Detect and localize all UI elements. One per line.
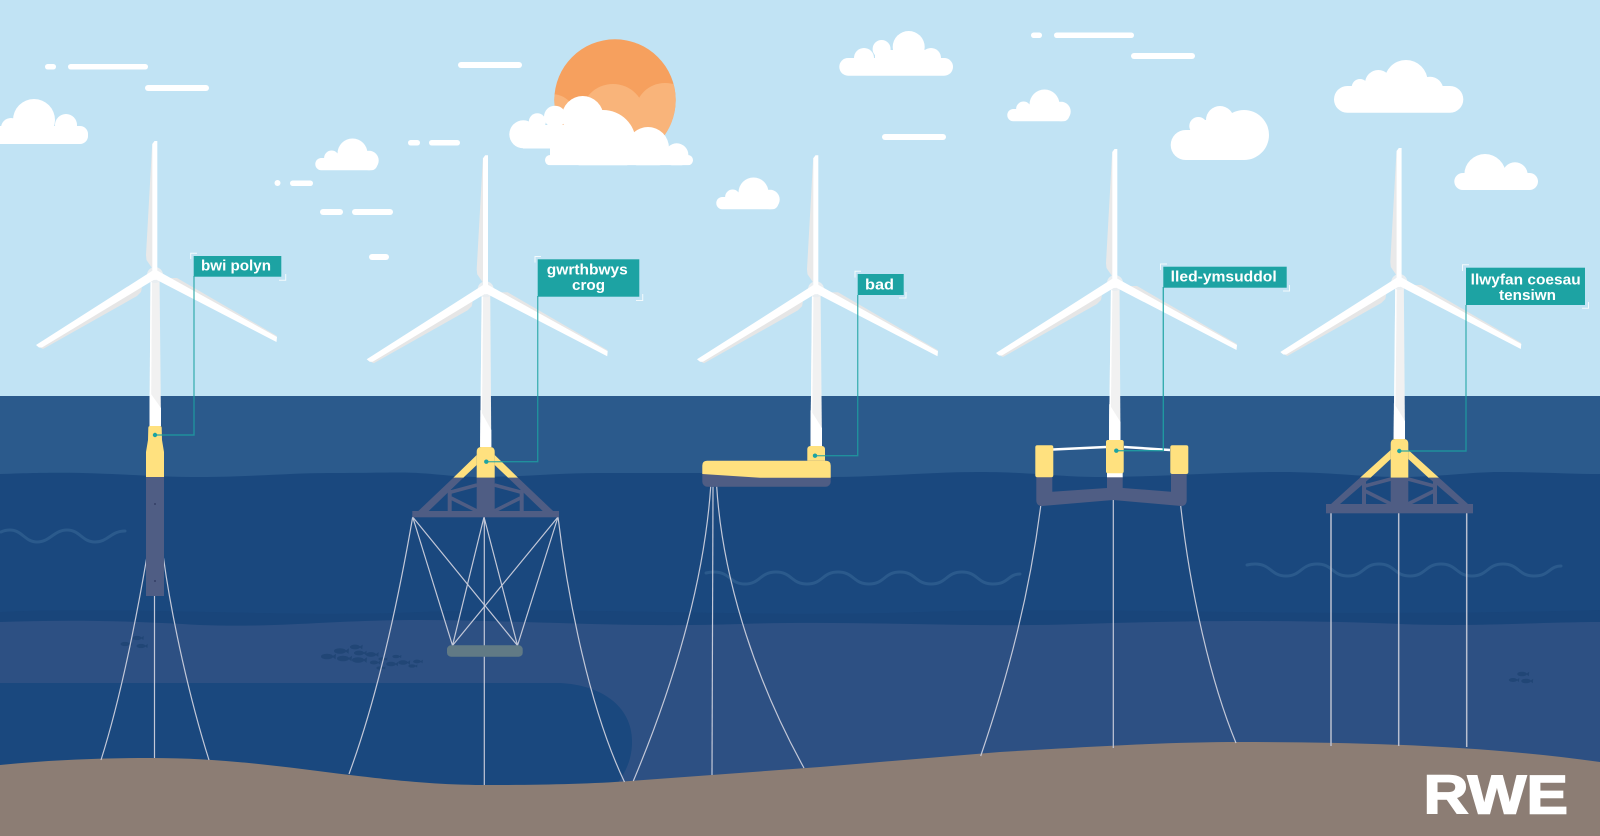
- callout: gwrthbwys crog: crog: [572, 277, 605, 294]
- mooring lines: semi-submersible: [981, 500, 1236, 756]
- cloud over sun: [509, 96, 693, 166]
- pendulum weight: [447, 645, 523, 657]
- fish school right: [1509, 672, 1533, 683]
- foundation: pendulum platform: [412, 447, 559, 517]
- cloud top centre: [839, 31, 953, 76]
- callout: gwrthbwys crog: gwrthbwys: [547, 262, 628, 279]
- wave line left: [1, 530, 125, 542]
- fish school left: [120, 636, 148, 648]
- sea upper layer: [0, 396, 1600, 836]
- callout: llwyfan coesau tensiwn: [1397, 265, 1588, 453]
- mooring lines: tension leg: [1331, 513, 1467, 747]
- callout: bwi polyn: bwi polyn: [201, 258, 271, 275]
- turbine 3: [697, 155, 938, 446]
- seabed: [0, 742, 1600, 836]
- sea deep layer: [0, 472, 1600, 836]
- turbine 1: [36, 141, 277, 426]
- cloud far right: [1454, 154, 1538, 190]
- RWE logo: RWE: [1424, 763, 1568, 825]
- wave line right: [1247, 564, 1561, 576]
- foundation: semi-submersible: [1035, 440, 1188, 506]
- sea mid layer: [0, 620, 1600, 836]
- callout: llwyfan coesau tensiwn: tensiwn: [1499, 287, 1556, 304]
- callout: bwi polyn: [153, 253, 286, 437]
- sun: [554, 39, 676, 135]
- callout: bad: [813, 271, 906, 458]
- callout: lled-ymsuddol: lled-ymsuddol: [1171, 269, 1277, 286]
- cloud left: [0, 99, 88, 144]
- cloud small 3: [1007, 90, 1071, 121]
- cloud small 2: [716, 178, 780, 209]
- callout: bad: bad: [865, 276, 894, 293]
- mooring lines: barge: [633, 487, 804, 781]
- fish school centre: [321, 645, 423, 670]
- cloud small 1: [315, 138, 379, 170]
- callout: gwrthbwys crog: [484, 256, 643, 464]
- sky: [0, 0, 1600, 397]
- cloud big right: [1171, 106, 1269, 160]
- mooring lines: spar buoy: [101, 558, 209, 760]
- wind streaks: [45, 32, 1195, 260]
- foundation: spar buoy: [146, 426, 164, 596]
- turbine 4: [996, 149, 1237, 440]
- wave line centre: [706, 572, 1020, 584]
- turbine 5: [1280, 148, 1521, 439]
- callout: lled-ymsuddol: [1114, 264, 1290, 453]
- foundation: tension leg platform: [1326, 439, 1473, 513]
- sea band shade: [0, 610, 1600, 836]
- callout: llwyfan coesau tensiwn: llwyfan coesau: [1471, 271, 1581, 288]
- mooring lines: pendulum ballast: [349, 517, 624, 785]
- cloud top right: [1334, 60, 1463, 113]
- sea lower dark pool: [0, 683, 632, 790]
- turbine 2: [367, 155, 608, 447]
- foundation: barge: [702, 446, 831, 487]
